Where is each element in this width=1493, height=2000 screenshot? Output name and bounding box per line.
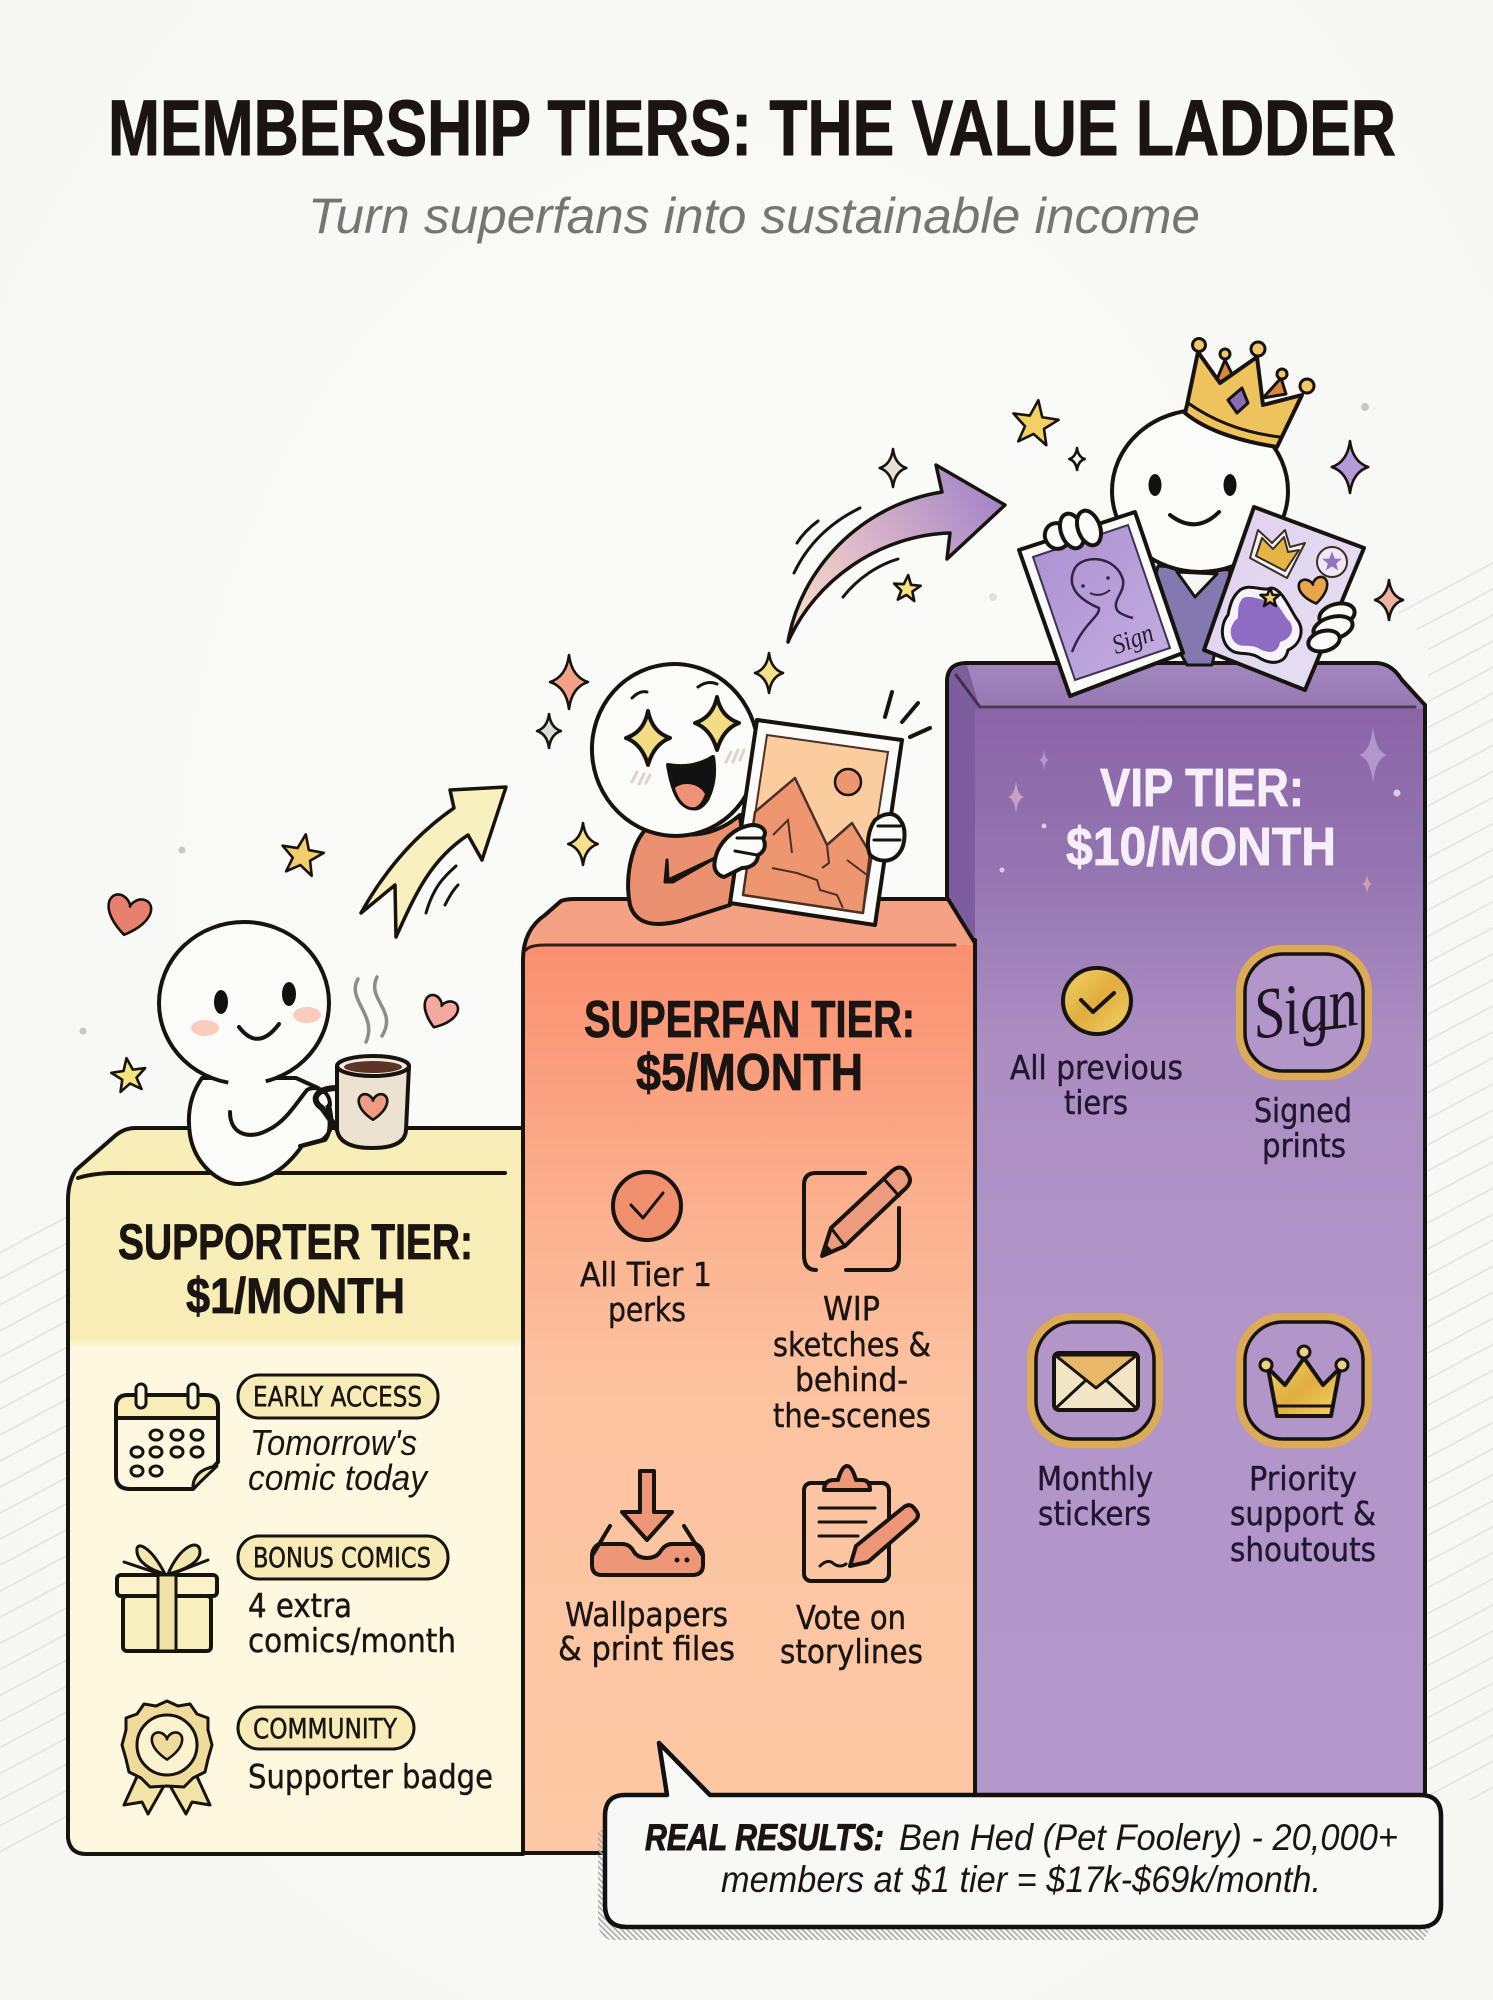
pill: community	[238, 1707, 414, 1749]
perk: WIP sketches: the-scenes	[773, 1396, 931, 1435]
VIP heading: $10/MONTH	[1066, 817, 1336, 877]
perk: bonus comics	[117, 1536, 456, 1660]
perk: early access: comic today	[248, 1457, 429, 1498]
VIP heading: VIP TIER:	[1100, 758, 1304, 818]
perk: all previous tiers: All previous	[1010, 1048, 1183, 1087]
callout text: REAL RESULTS:	[645, 1817, 884, 1858]
icon: rosette badge	[122, 1701, 212, 1814]
perk: signed prints: Signed	[1254, 1091, 1352, 1130]
perk: vote on storylines: storylines	[780, 1632, 923, 1671]
icon: gift	[117, 1545, 217, 1651]
perk: signed prints: Sign	[1248, 961, 1362, 1055]
decorations: superfan sparkles	[537, 653, 783, 865]
hands	[714, 825, 765, 877]
perk: wallpapers and print files: & print files	[558, 1629, 735, 1668]
panel: superfan tier	[523, 899, 975, 1853]
decorations: VIP stars and sparkles	[880, 397, 1403, 620]
head	[1112, 410, 1288, 572]
pill: bonus comics	[238, 1536, 448, 1579]
perk: all tier 1 perks: perks	[608, 1290, 686, 1329]
shirt	[1150, 566, 1230, 665]
perk: all previous tiers: tiers	[1064, 1083, 1128, 1122]
sticker sheet	[1204, 507, 1364, 690]
callout bubble	[605, 1743, 1441, 1927]
perk: signed prints: prints	[1262, 1126, 1346, 1165]
subtitle: Turn superfans into sustainable income	[308, 188, 1200, 244]
perk: priority support and shoutouts: support &	[1230, 1494, 1376, 1533]
perk: wallpapers and print files: Wallpapers	[565, 1595, 728, 1634]
body	[189, 1078, 330, 1184]
perk: WIP sketches: behind-	[795, 1360, 908, 1399]
perk: early access	[116, 1375, 438, 1498]
star eyes	[626, 711, 670, 765]
arrow: purple curved arrow	[788, 465, 1005, 642]
supporter heading	[118, 1214, 473, 1324]
callout text: Ben Hed (Pet Foolery) - 20,000+	[899, 1817, 1398, 1858]
signed portrait print: Sign	[1108, 617, 1157, 660]
arm	[230, 1088, 330, 1135]
perk: all tier 1 perks: All Tier 1	[580, 1255, 712, 1294]
pill: early access: EARLY ACCESS	[253, 1380, 422, 1413]
character: VIP with crown	[1019, 338, 1364, 696]
perk: monthly stickers: stickers	[1038, 1494, 1151, 1533]
perk: community: Supporter badge	[248, 1757, 493, 1796]
pill: bonus comics: BONUS COMICS	[253, 1541, 431, 1574]
perk: early access: Tomorrow's	[250, 1422, 417, 1463]
hands	[1041, 507, 1357, 655]
supporter heading: $1/MONTH	[186, 1268, 405, 1324]
perk: bonus comics: 4 extra	[248, 1586, 352, 1625]
callout: real results	[598, 1743, 1441, 1940]
VIP side face	[949, 665, 980, 1800]
perk: WIP sketches: WIP	[823, 1289, 880, 1328]
perk: priority support and shoutouts: Priority	[1249, 1459, 1357, 1498]
perk: WIP sketches: sketches &	[773, 1325, 931, 1364]
perk: all tier 1 perks	[580, 1172, 712, 1329]
callout shadow	[598, 1830, 1432, 1940]
background stripes right	[1385, 545, 1493, 1800]
signed portrait print	[1019, 512, 1183, 696]
background stripes left	[0, 1215, 66, 1870]
perk: all previous tiers	[1010, 968, 1183, 1122]
superfan heading: $5/MONTH	[636, 1044, 863, 1102]
head	[581, 653, 769, 847]
perk: monthly stickers	[1031, 1317, 1159, 1533]
VIP box body	[947, 663, 1425, 1800]
superfan heading	[584, 991, 915, 1102]
character: superfan with print	[581, 653, 930, 925]
superfan heading: SUPERFAN TIER:	[584, 991, 915, 1049]
sweater	[628, 815, 745, 924]
perk: wallpapers and print files	[558, 1471, 735, 1668]
supporter box	[68, 1128, 523, 1854]
perk: vote on storylines: Vote on	[796, 1598, 906, 1637]
perk: bonus comics: comics/month	[248, 1621, 456, 1660]
pill: community: COMMUNITY	[253, 1712, 398, 1745]
mouth	[668, 757, 714, 809]
pill: early access	[238, 1375, 438, 1418]
character: supporter with coffee	[159, 922, 409, 1184]
VIP heading	[1066, 758, 1336, 877]
panel: VIP tier	[947, 663, 1425, 1800]
mug	[316, 977, 409, 1148]
callout text	[645, 1817, 1398, 1900]
panel: supporter tier	[68, 1128, 523, 1854]
arrow: yellow up arrow	[361, 787, 506, 937]
shine lines	[885, 692, 930, 737]
perk: WIP sketches	[773, 1168, 931, 1435]
VIP sparkles	[1000, 727, 1400, 894]
print with mountains	[730, 720, 902, 925]
decorations: supporter hearts and stars	[80, 831, 460, 1093]
perk: signed prints	[1240, 949, 1368, 1165]
callout text: members at $1 tier = $17k-$69k/month.	[721, 1859, 1321, 1900]
perk: monthly stickers: Monthly	[1037, 1459, 1153, 1498]
head	[159, 922, 329, 1084]
crown	[1185, 338, 1314, 447]
icon: calendar	[116, 1384, 218, 1489]
perk: vote on storylines	[780, 1466, 923, 1671]
superfan box	[523, 899, 975, 1853]
supporter heading: SUPPORTER TIER:	[118, 1214, 473, 1270]
perk: community	[122, 1701, 493, 1814]
perk: priority support and shoutouts	[1230, 1317, 1376, 1569]
VIP front face	[975, 709, 1425, 1800]
perk: priority support and shoutouts: shoutouts	[1230, 1530, 1376, 1569]
